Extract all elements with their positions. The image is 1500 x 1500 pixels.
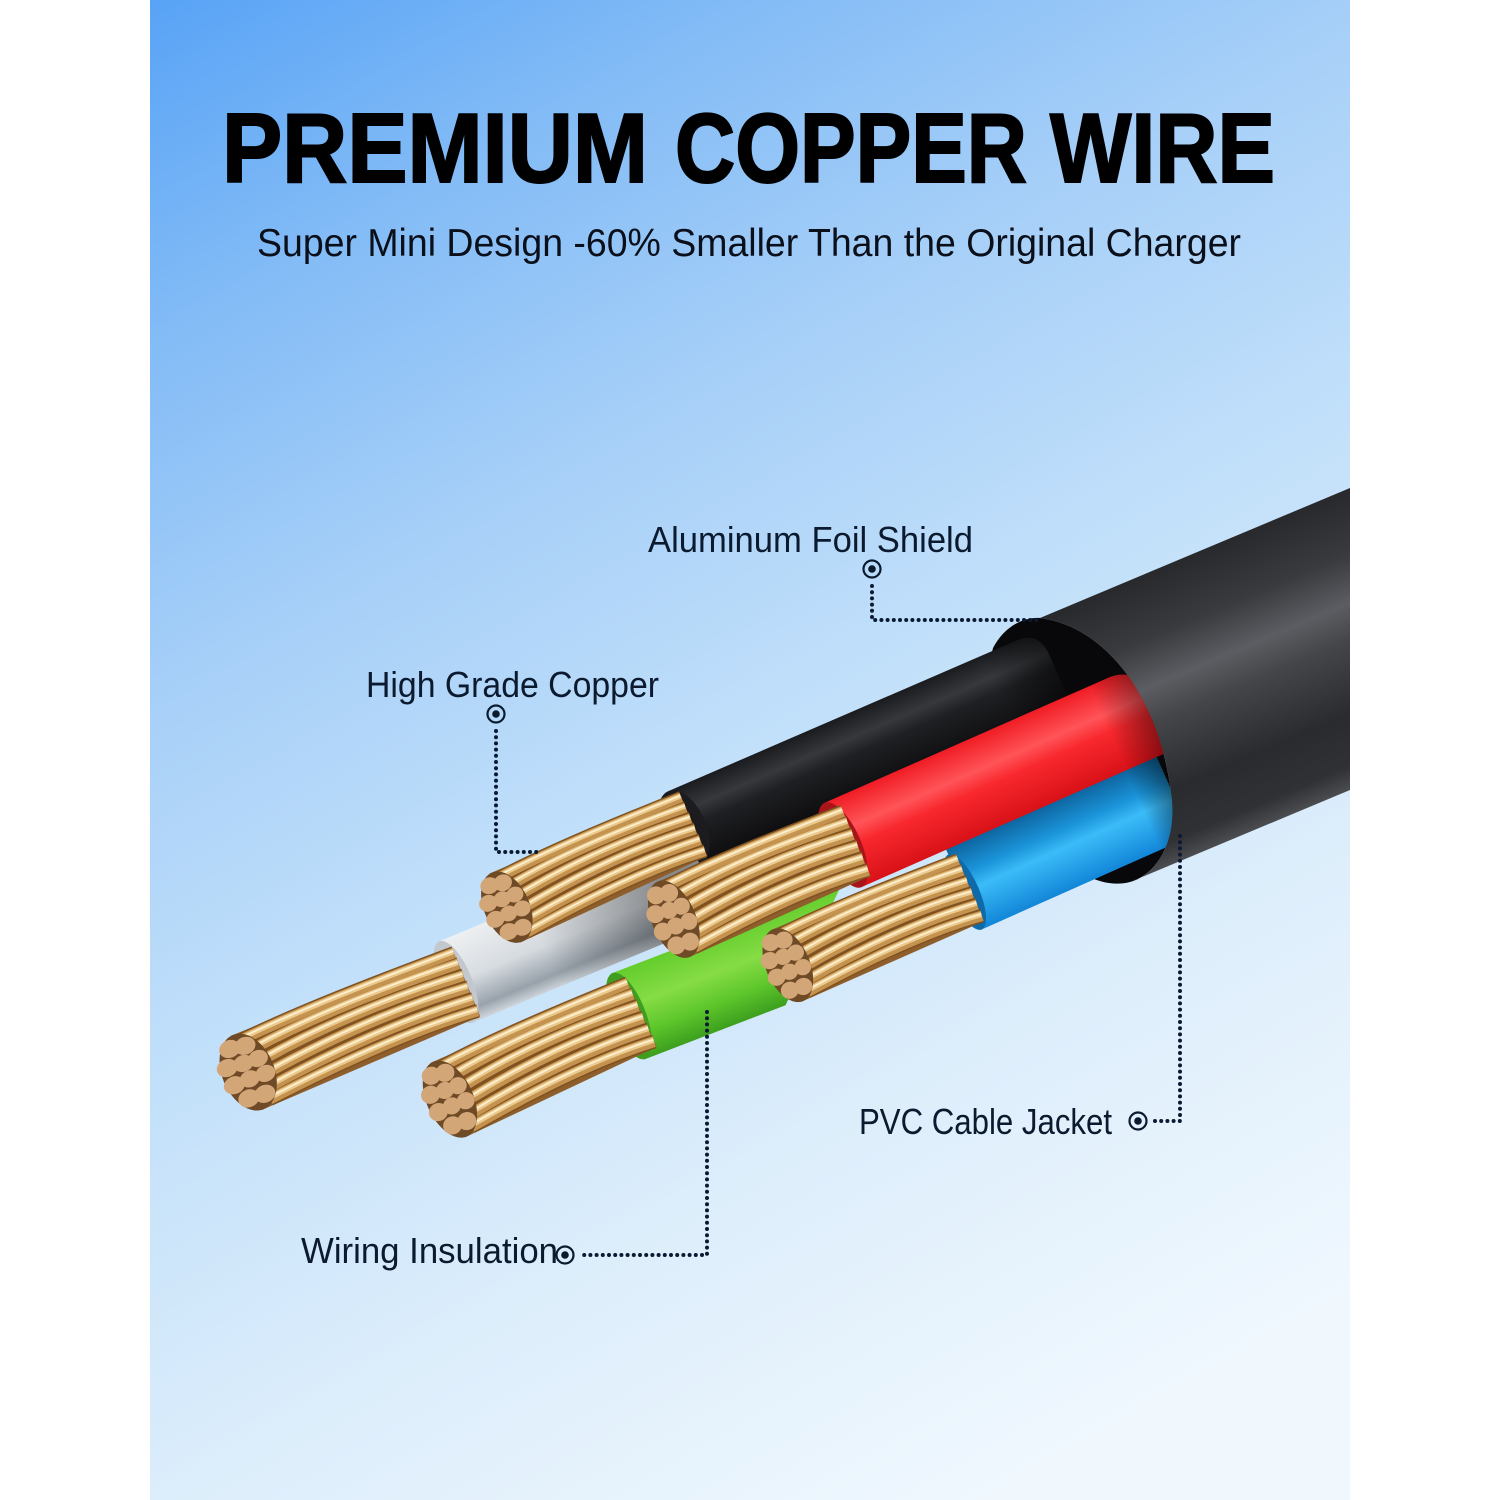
title: WIRE	[1050, 93, 1275, 203]
callout: High Grade Copper	[366, 664, 659, 852]
callout: High Grade Copper: High Grade Copper	[366, 664, 659, 705]
title: PREMIUM	[222, 93, 648, 203]
callout: Wiring Insulation: Wiring Insulation	[301, 1230, 558, 1271]
jacket inner cavity	[960, 618, 1172, 884]
wire: red insulation	[808, 666, 1173, 894]
black PVC jacket	[1040, 488, 1350, 882]
cable illustration	[206, 488, 1350, 1147]
copper strands: white wire	[206, 945, 481, 1120]
callout: Aluminum Foil Shield: Aluminum Foil Shield	[648, 519, 973, 560]
callout: PVC Cable Jacket: PVC Cable Jacket	[859, 1101, 1112, 1142]
copper strands: blue wire	[751, 852, 985, 1010]
title	[222, 93, 1275, 203]
wire: green insulation	[597, 885, 874, 1065]
callout: PVC Cable Jacket	[859, 836, 1180, 1142]
callout: Wiring Insulation	[301, 1012, 707, 1271]
wire: white insulation	[424, 838, 722, 1029]
title: COPPER	[675, 93, 1027, 203]
subtitle: Super Mini Design -60% Smaller Than the Original Charger	[257, 222, 1241, 265]
copper strands: green wire	[410, 975, 658, 1147]
callout: Aluminum Foil Shield	[648, 519, 1042, 620]
panel: blue gradient background	[150, 0, 1350, 1500]
copper strands: black wire	[469, 790, 709, 952]
copper strands: red wire	[636, 803, 872, 966]
wire: blue insulation	[932, 753, 1192, 935]
wire: black insulation	[648, 631, 1071, 873]
